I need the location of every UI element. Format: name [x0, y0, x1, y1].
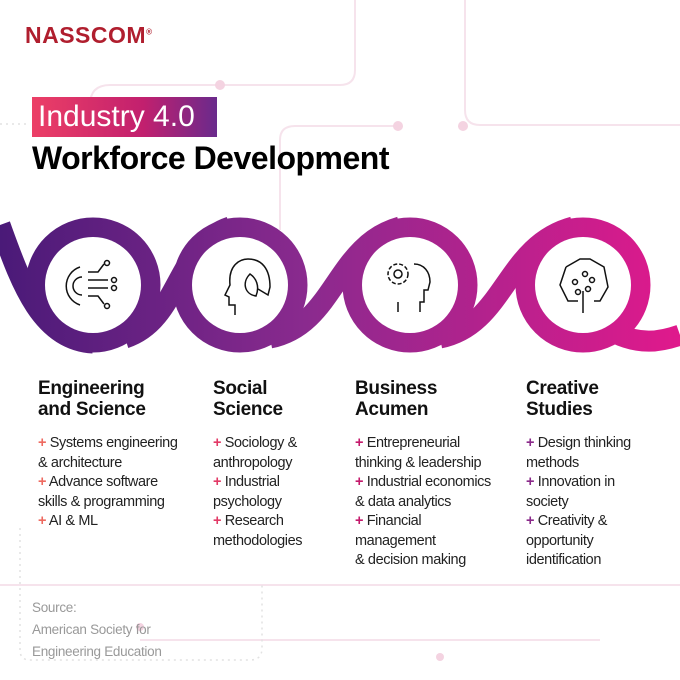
column: Business Acumen: Business: [355, 378, 437, 399]
column: Social Science: anthropology: [213, 454, 292, 470]
title tag: Industry 4.0: Industry 4.0: [38, 100, 195, 133]
column: Creative Studies: society: [526, 494, 568, 510]
column: Engineering and Science: Engineering: [38, 378, 144, 399]
column: Social Science: [213, 378, 302, 548]
title tag: Industry 4.0: [32, 97, 217, 137]
icon: gear circuit: [66, 260, 116, 308]
ribbon with icons: [0, 216, 680, 354]
column: Business Acumen: & decision making: [355, 552, 466, 568]
source note: American Society for: [32, 622, 151, 637]
column: Business Acumen: + Entrepreneurial: [355, 435, 460, 451]
icon: head leaf: [225, 259, 270, 315]
column: Engineering and Science: and Science: [38, 399, 146, 420]
column: Social Science: + Sociology &: [213, 435, 297, 451]
source note: Source:: [32, 600, 76, 615]
column: Business Acumen: + Industrial economics: [355, 474, 491, 490]
source note: Engineering Education: [32, 644, 162, 659]
column: Business Acumen: & data analytics: [355, 494, 451, 510]
column: Social Science: + Industrial: [213, 474, 280, 490]
column: Business Acumen: Acumen: [355, 399, 428, 420]
column: Social Science: Science: [213, 399, 283, 420]
column: Business Acumen: + Financial: [355, 513, 421, 529]
column: Creative Studies: Studies: [526, 399, 593, 420]
column: Engineering and Science: + Systems engineering: [38, 435, 178, 451]
source note: [32, 600, 162, 659]
icon: brain circuit: [560, 259, 608, 313]
icon: gear head: [388, 264, 430, 312]
column: Creative Studies: identification: [526, 552, 601, 568]
column: Creative Studies: + Design thinking: [526, 435, 631, 451]
column: Business Acumen: [355, 378, 491, 568]
column: Engineering and Science: + Advance software: [38, 474, 158, 490]
column: Business Acumen: thinking & leadership: [355, 454, 481, 470]
column: Creative Studies: Creative: [526, 378, 599, 399]
column: Creative Studies: methods: [526, 454, 579, 470]
column: Engineering and Science: [38, 378, 178, 529]
column: Creative Studies: + Creativity &: [526, 513, 607, 529]
title: Workforce Development: Workforce Development: [32, 140, 389, 176]
column: Creative Studies: + Innovation in: [526, 474, 615, 490]
column: Business Acumen: management: [355, 532, 436, 548]
column: Social Science: + Research: [213, 513, 284, 529]
column: Social Science: methodologies: [213, 532, 302, 548]
column: Engineering and Science: & architecture: [38, 454, 122, 470]
logo: NASSCOM: NASSCOM®: [25, 22, 152, 48]
column: Engineering and Science: + AI & ML: [38, 513, 98, 529]
column: Creative Studies: [526, 378, 631, 568]
column: Creative Studies: opportunity: [526, 532, 593, 548]
column: Social Science: Social: [213, 378, 267, 399]
column: Engineering and Science: skills & programming: [38, 494, 165, 510]
column: Social Science: psychology: [213, 494, 282, 510]
